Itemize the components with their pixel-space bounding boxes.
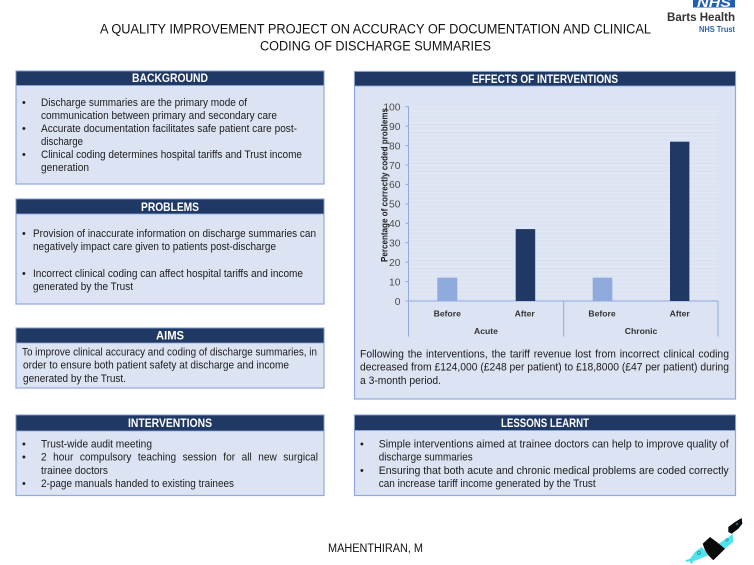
lessons bullet list: • bbox=[360, 438, 364, 450]
effects text: a 3-month period. bbox=[360, 375, 441, 387]
heading: interventions bbox=[16, 415, 324, 431]
heading: effects of interventions: EFFECTS OF INTERVENTIONS bbox=[472, 74, 618, 86]
lessons bullet list bbox=[360, 438, 730, 490]
interventions bullet list: • bbox=[22, 452, 26, 464]
problems bullet list: • bbox=[22, 268, 26, 280]
bar: chronic before 12 bbox=[593, 278, 612, 301]
lessons bullet list: discharge summaries bbox=[379, 452, 473, 464]
problems bullet list: Provision of inaccurate information on discharge summaries can bbox=[33, 228, 316, 240]
x axis category labels bbox=[434, 308, 690, 336]
problems bullet list: negatively impact care given to patients post-discharge bbox=[33, 241, 276, 253]
panel: background bbox=[16, 71, 324, 184]
logo: Barts Health NHS Trust bbox=[667, 0, 735, 34]
heading: interventions: INTERVENTIONS bbox=[128, 418, 212, 430]
interventions bullet list: 2-page manuals handed to existing trainees bbox=[41, 478, 235, 490]
bar chart bbox=[378, 102, 718, 336]
interventions bullet list: • bbox=[22, 438, 26, 450]
aims text bbox=[22, 346, 317, 385]
interventions bullet list: trainee doctors bbox=[41, 465, 109, 477]
interventions bullet list: 2 hour compulsory teaching session for all new surgical bbox=[41, 452, 318, 464]
lessons bullet list: Simple interventions aimed at trainee doctors can help to improve quality of bbox=[379, 438, 730, 450]
heading: background bbox=[16, 71, 324, 86]
y axis tick labels: 0 bbox=[395, 297, 401, 308]
title bbox=[100, 22, 651, 54]
interventions bullet list bbox=[22, 438, 318, 490]
title: CODING OF DISCHARGE SUMMARIES bbox=[260, 38, 491, 54]
lessons bullet list: • bbox=[360, 465, 364, 477]
panel: lessons learnt bbox=[354, 415, 736, 496]
x axis category labels: After bbox=[515, 308, 535, 318]
problems bullet list bbox=[22, 228, 316, 293]
background bullet list: Clinical coding determines hospital tariffs and Trust income bbox=[41, 149, 302, 161]
heading: problems: PROBLEMS bbox=[141, 202, 199, 214]
effects text: decreased from £124,000 (£248 per patient) to £18,8000 (£47 per patient) during bbox=[360, 362, 729, 374]
background bullet list: • bbox=[22, 149, 26, 161]
bar: chronic after 82 bbox=[670, 142, 689, 301]
x axis category labels: Chronic bbox=[625, 326, 657, 336]
y axis tick labels bbox=[383, 102, 401, 308]
panel: problems bbox=[16, 199, 324, 304]
aims text: order to ensure both patient safety at discharge and income bbox=[23, 360, 289, 372]
effects text: Following the interventions, the tariff revenue lost from incorrect clinical coding bbox=[360, 348, 729, 360]
y axis tick labels: 90 bbox=[389, 122, 401, 133]
background bullet list: generation bbox=[41, 162, 89, 174]
effects text bbox=[360, 348, 729, 387]
heading: effects of interventions bbox=[354, 72, 736, 86]
x axis category labels: Before bbox=[588, 308, 616, 318]
title: A QUALITY IMPROVEMENT PROJECT ON ACCURACY OF DOCUMENTATION AND CLINICAL bbox=[100, 22, 651, 38]
y axis tick labels: 70 bbox=[389, 161, 401, 172]
lessons bullet list: Ensuring that both acute and chronic medical problems are coded correctly bbox=[379, 465, 729, 477]
heading: aims bbox=[16, 328, 324, 343]
y axis tick labels: 40 bbox=[389, 219, 401, 230]
heading: background: BACKGROUND bbox=[132, 73, 208, 85]
problems bullet list: • bbox=[22, 228, 26, 240]
background bullet list: Discharge summaries are the primary mode of bbox=[41, 97, 248, 109]
y axis tick labels: 30 bbox=[389, 238, 401, 250]
problems bullet list: generated by the Trust bbox=[33, 281, 133, 293]
panel: aims bbox=[16, 328, 324, 388]
interventions bullet list: Trust-wide audit meeting bbox=[41, 438, 152, 450]
bar: acute before 12 bbox=[437, 278, 457, 301]
y axis tick labels: 80 bbox=[389, 141, 401, 152]
aims text: To improve clinical accuracy and coding of discharge summaries, in bbox=[22, 346, 317, 358]
background bullet list bbox=[22, 97, 302, 174]
aims text: generated by the Trust. bbox=[23, 373, 126, 385]
background bullet list: • bbox=[22, 123, 26, 135]
interventions bullet list: • bbox=[22, 478, 26, 490]
logo: Barts Health NHS Trust: NHS Trust bbox=[699, 24, 735, 34]
y axis title: Percentage of correctly coded problems bbox=[378, 108, 390, 262]
y axis tick labels: 20 bbox=[389, 258, 401, 269]
bar: acute after 37 bbox=[516, 229, 535, 301]
background bullet list: Accurate documentation facilitates safe patient care post- bbox=[41, 123, 297, 135]
heading: lessons learnt: LESSONS LEARNT bbox=[501, 418, 589, 430]
heading: problems bbox=[16, 199, 324, 214]
panel: effects of interventions bbox=[354, 72, 736, 399]
background bullet list: • bbox=[22, 97, 26, 109]
panel: interventions bbox=[16, 415, 324, 496]
heading: lessons learnt bbox=[354, 415, 736, 430]
y axis tick labels: 10 bbox=[389, 277, 401, 288]
heading: aims: AIMS bbox=[156, 330, 184, 342]
background bullet list: communication between primary and secondary care bbox=[41, 110, 277, 122]
y axis tick labels: 50 bbox=[389, 200, 401, 211]
lessons bullet list: can increase tariff income generated by the Trust bbox=[379, 478, 596, 490]
y axis tick labels: 60 bbox=[389, 180, 401, 191]
background bullet list: discharge bbox=[41, 136, 83, 148]
icon: map bbox=[685, 518, 742, 564]
x axis category labels: Acute bbox=[474, 326, 498, 336]
y axis tick labels: 100 bbox=[383, 102, 401, 114]
problems bullet list: Incorrect clinical coding can affect hospital tariffs and income bbox=[33, 268, 303, 280]
x axis category labels: Before bbox=[434, 308, 461, 318]
author: MAHENTHIRAN, M bbox=[328, 543, 423, 555]
x axis category labels: After bbox=[670, 308, 690, 318]
logo: Barts Health NHS Trust: Barts Health bbox=[667, 12, 735, 24]
